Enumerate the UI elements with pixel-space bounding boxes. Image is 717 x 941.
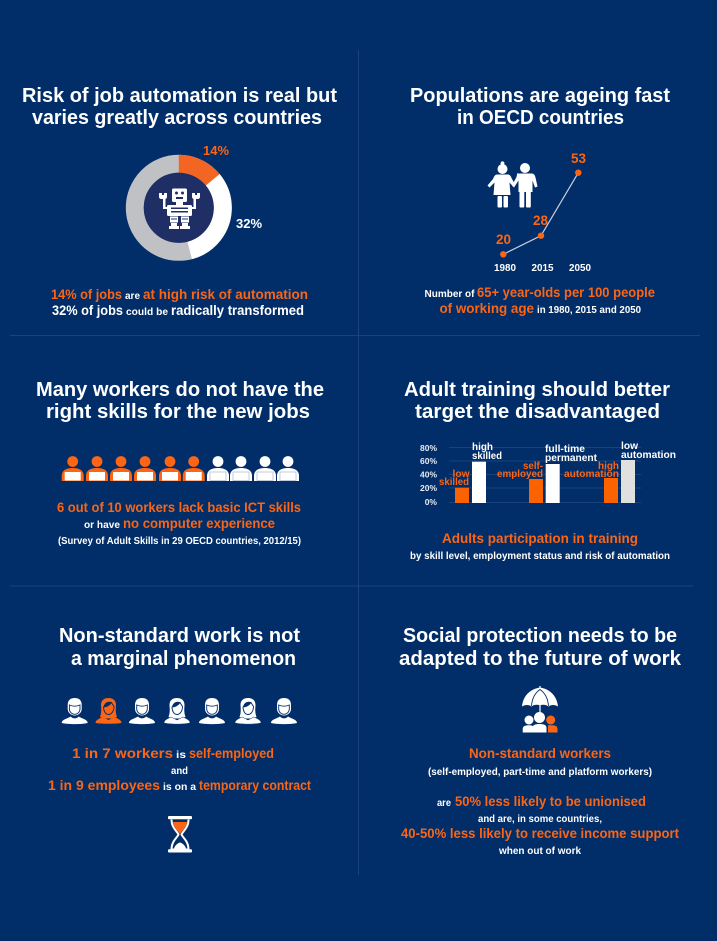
bar chart: skilled xyxy=(472,450,502,462)
bar chart: 80% xyxy=(420,443,437,453)
heading: non-standard work xyxy=(59,625,300,670)
heading: skills: right skills for the new jobs xyxy=(46,401,310,423)
bar chart: full-time xyxy=(545,443,585,455)
icon: robot xyxy=(159,188,200,229)
text: ageing statistics: of working age xyxy=(440,301,534,316)
panel: adult training xyxy=(404,379,676,562)
bar chart: low xyxy=(621,440,639,452)
heading: ageing: in OECD countries xyxy=(457,107,624,129)
text: automation statistics: at high risk of automation xyxy=(143,287,308,302)
text: automation statistics: radically transformed xyxy=(171,303,304,318)
heading: non-standard work: Non-standard work is not xyxy=(59,625,300,647)
text: work statistics: and xyxy=(171,765,188,777)
text: ageing statistics: 65+ year-olds per 100 people xyxy=(477,285,655,300)
bar chart: 0% xyxy=(425,497,437,507)
line chart: 1980 xyxy=(494,262,516,274)
icon: elderly couple xyxy=(488,161,538,208)
heading: social protection: adapted to the future of work xyxy=(399,648,682,670)
text: ageing statistics: in 1980, 2015 and 2050 xyxy=(537,304,641,316)
text: ICT skills: 6 out of 10 workers lack basic ICT skills xyxy=(57,500,301,515)
text: work statistics: 1 in 9 employees xyxy=(48,778,160,793)
heading: social protection: Social protection needs to be xyxy=(403,625,677,647)
text: training statistics: Adults participation in training xyxy=(442,531,638,546)
heading: skills: Many workers do not have the xyxy=(36,379,324,401)
bar chart: permanent xyxy=(545,452,597,464)
heading: job automation xyxy=(22,85,337,129)
heading: non-standard work: a marginal phenomenon xyxy=(71,648,296,670)
text: automation statistics: could be xyxy=(126,306,168,318)
line chart: 2050 xyxy=(569,262,591,274)
heading: ageing: Populations are ageing fast xyxy=(410,85,670,107)
bar chart: high xyxy=(472,441,493,453)
heading: training xyxy=(404,379,670,423)
bar chart: automation xyxy=(621,449,676,461)
line chart: 2015 xyxy=(532,262,554,274)
bar chart: low xyxy=(452,468,470,480)
text: work statistics xyxy=(48,746,311,793)
text: automation statistics: 14% of jobs xyxy=(51,287,122,302)
bar chart: skilled xyxy=(439,476,469,488)
line chart xyxy=(494,150,591,274)
text: ICT skills: or have xyxy=(84,519,120,531)
line chart: 28 xyxy=(533,212,548,228)
text: ICT skills: no computer experience xyxy=(123,516,275,531)
text: automation statistics: are xyxy=(125,290,140,302)
bar chart: employed xyxy=(497,468,543,480)
heading: social protection xyxy=(399,625,682,670)
panel: job automation risk xyxy=(22,85,337,318)
text: work statistics: temporary contract xyxy=(199,778,311,793)
text: ageing statistics xyxy=(424,285,655,316)
label: 14%: 14% xyxy=(203,143,229,158)
text: ICT skills xyxy=(57,500,301,547)
text: automation statistics: 32% of jobs xyxy=(52,303,123,318)
heading: job automation: varies greatly across countries xyxy=(32,107,322,129)
panel: ageing populations xyxy=(410,85,670,316)
text: training statistics: by skill level, employment status and risk of automation xyxy=(410,550,670,562)
text: social protection statistics: Non-standard workers xyxy=(469,746,611,761)
text: automation statistics xyxy=(51,287,308,318)
icon row: people xyxy=(62,698,297,724)
donut chart xyxy=(135,164,223,252)
text: work statistics: is xyxy=(176,749,186,761)
panel: social protection xyxy=(399,625,682,857)
icon row: workers at computers xyxy=(62,456,299,481)
text: social protection statistics: are xyxy=(437,797,451,809)
panel: non-standard work xyxy=(48,625,311,852)
line chart: 53 xyxy=(571,150,586,166)
heading: training: target the disadvantaged xyxy=(415,401,660,423)
panel: workers skills xyxy=(36,379,324,547)
bar chart xyxy=(420,440,676,507)
label: 32%: 32% xyxy=(236,216,262,231)
line chart: 20 xyxy=(496,231,511,247)
text: ageing statistics: Number of xyxy=(424,288,475,300)
text: training statistics xyxy=(410,531,670,562)
bar chart: 40% xyxy=(420,470,437,480)
icon: umbrella over people xyxy=(522,686,558,732)
text: social protection statistics xyxy=(401,746,679,857)
text: social protection statistics: 50% less likely to be unionised xyxy=(455,794,646,809)
heading: skills xyxy=(36,379,324,423)
text: ICT skills: (Survey of Adult Skills in 29 OECD countries, 2012/15) xyxy=(58,536,301,547)
text: social protection statistics: when out of work xyxy=(498,845,581,857)
heading: job automation: Risk of job automation is real but xyxy=(22,85,337,107)
text: social protection statistics: (self-employed, part-time and platform workers) xyxy=(428,766,652,778)
text: social protection statistics: 40-50% less likely to receive income support xyxy=(401,826,679,841)
bar chart: self- xyxy=(523,460,543,472)
bar chart: 60% xyxy=(420,456,437,466)
heading: training: Adult training should better xyxy=(404,379,670,401)
text: work statistics: 1 in 7 workers xyxy=(72,746,173,761)
bar chart: high xyxy=(598,460,619,472)
text: social protection statistics: and are, in some countries, xyxy=(478,813,602,825)
bar chart: automation xyxy=(564,468,619,480)
heading: ageing xyxy=(410,85,670,129)
bar chart: 20% xyxy=(420,483,437,493)
text: work statistics: is on a xyxy=(163,781,196,793)
icon: hourglass xyxy=(168,816,192,852)
text: work statistics: self-employed xyxy=(189,746,274,761)
